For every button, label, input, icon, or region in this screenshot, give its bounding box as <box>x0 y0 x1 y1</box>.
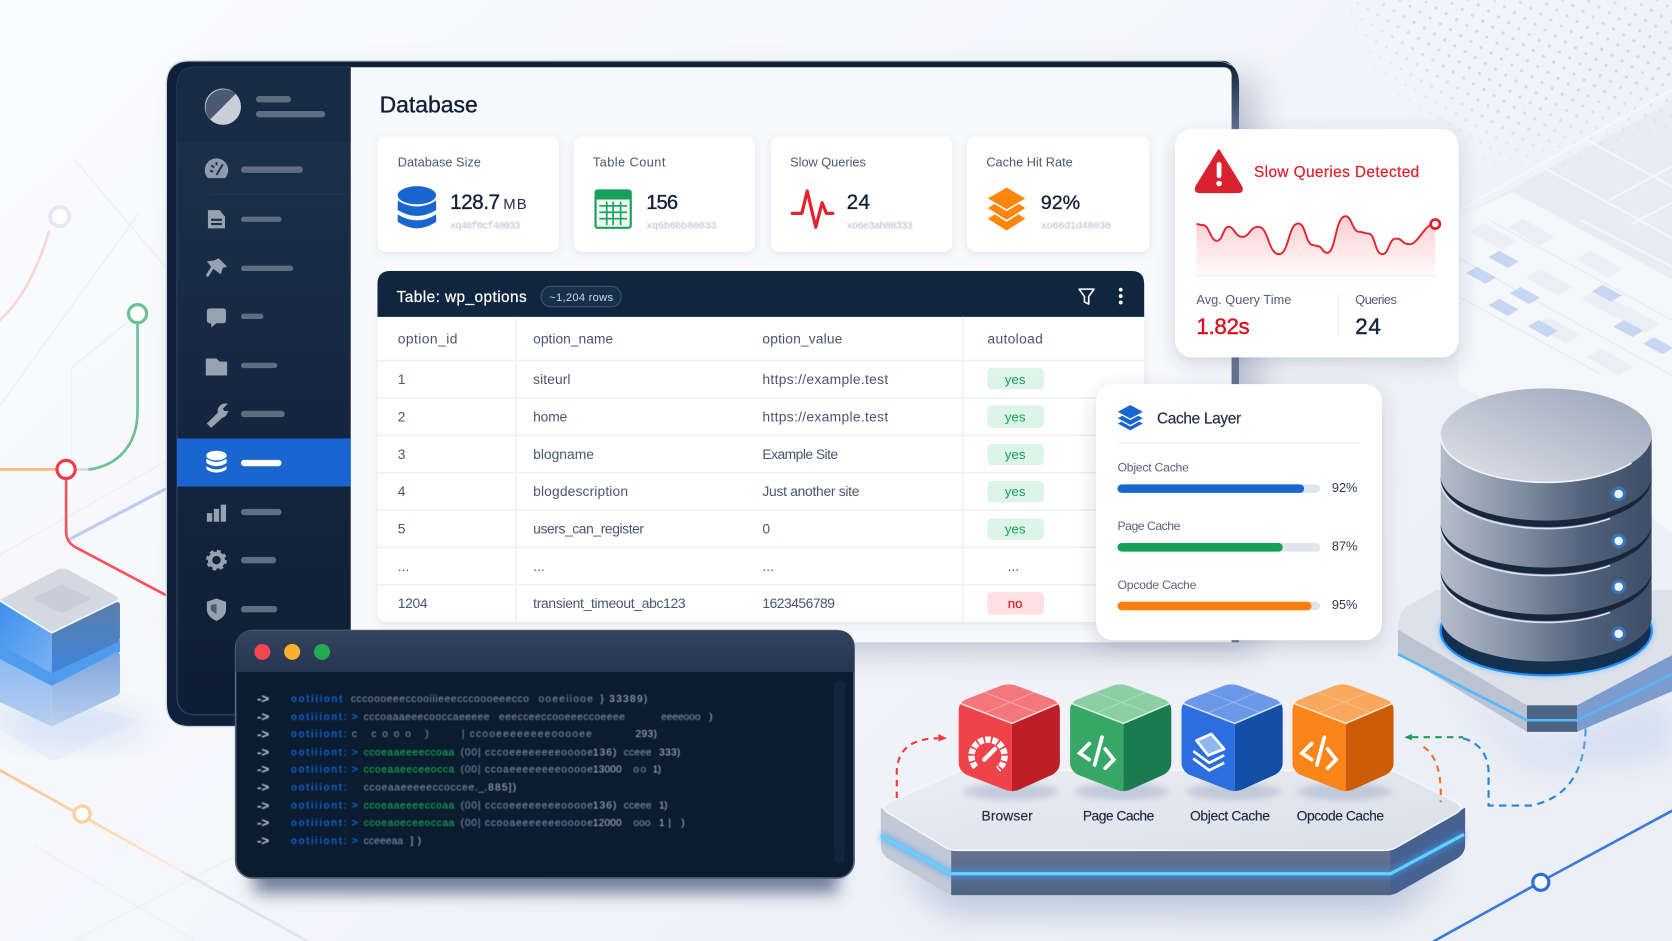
arrow: red dashed into browser cube <box>897 734 947 798</box>
terminal output: -> <box>257 726 269 741</box>
terminal output: -> <box>257 798 269 813</box>
cube: Browser <box>956 681 1062 795</box>
cube: Object Cache <box>1179 681 1285 795</box>
connector lines and nodes: left network <box>0 207 1672 941</box>
terminal output: ccoeaaeeceeocca <box>364 764 455 775</box>
terminal output: -> <box>257 761 269 776</box>
stat card: Database Size: MB <box>503 196 527 213</box>
stat card: Table Count: Table Count <box>593 154 666 169</box>
nav icon: folder <box>206 358 227 376</box>
terminal output: > <box>352 712 358 723</box>
terminal output: (00| cccoeeeeeeeeooooe <box>461 801 593 812</box>
progress: Opcode Cache: Opcode Cache <box>1118 578 1197 592</box>
nav bar <box>241 509 282 515</box>
terminal output: cceee <box>624 747 652 758</box>
main content panel <box>351 67 1232 642</box>
metric: queries <box>1355 292 1397 339</box>
terminal output: ccoeaoeceeoccaa <box>364 818 455 829</box>
sidebar <box>177 67 351 715</box>
nav icon: dashboard <box>205 158 228 178</box>
icon: stacked pages <box>1193 734 1224 770</box>
nav icon: settings <box>207 551 226 569</box>
terminal output: .885]) <box>484 783 516 794</box>
stat card: Table Count: 156 <box>646 192 678 214</box>
table header bar: Table: wp_options <box>397 289 527 306</box>
sparkline chart <box>1196 216 1440 276</box>
terminal output: ) <box>709 712 712 723</box>
metric: average query time: 1.82s <box>1196 314 1250 339</box>
table rows: blogname <box>533 446 594 462</box>
arrow: blue dashed link to database <box>1463 728 1586 806</box>
frame <box>166 61 1239 727</box>
terminal output: ]) <box>411 836 421 847</box>
progress: Object Cache <box>1118 461 1357 495</box>
progress: Page Cache <box>1118 519 1357 554</box>
terminal output: ootiiiont: <box>291 729 347 740</box>
table header bar: ~1,204 rows <box>549 292 614 304</box>
terminal output: ooo <box>633 818 651 829</box>
stat card: Slow Queries: 24 <box>847 191 870 214</box>
cube labels: Browser <box>982 807 1033 823</box>
nav bar <box>241 363 277 368</box>
active nav item: database <box>177 438 351 487</box>
terminal output: > <box>352 818 358 829</box>
terminal output: (00| ccoaeeeeeeeeooooe <box>461 764 593 775</box>
nav icon: comment <box>207 308 226 328</box>
table grid <box>377 317 1144 622</box>
stat card: Cache Hit Rate <box>967 137 1150 252</box>
terminal output: ootiiiont: <box>291 764 347 775</box>
terminal output: -> <box>257 709 269 724</box>
cube labels: Opcode Cache <box>1297 807 1384 823</box>
terminal output: 1| ) <box>659 818 685 829</box>
left stacked blue cubes <box>0 569 149 740</box>
stat card: Database Size: 128.7 <box>450 191 500 214</box>
terminal output: -> <box>257 780 269 795</box>
table rows: 5 <box>398 520 406 536</box>
table rows: 0 <box>762 520 770 536</box>
progress: Opcode Cache <box>1118 578 1357 612</box>
terminal output: 1) <box>659 801 668 812</box>
nav bar <box>241 217 282 222</box>
table column headers: autoload <box>987 331 1043 347</box>
stat card: Database Size: Database Size <box>398 154 481 169</box>
terminal output: ooeeiiooe <box>538 694 593 705</box>
terminal output: ootiiiont: <box>291 783 347 794</box>
terminal output: > <box>352 764 358 775</box>
database cylinder on platform <box>1398 388 1672 768</box>
stat card: Database Size: xq46f0cf48033 <box>450 220 520 232</box>
autoload status pills: yes <box>1005 372 1026 387</box>
terminal output: (00| cccoeeeeeeeeooooe <box>461 747 593 758</box>
heading: Database: Database <box>380 92 478 118</box>
nav bar <box>241 314 263 319</box>
platform top surface <box>884 770 1461 850</box>
terminal output: -> <box>257 815 269 830</box>
terminal title bar <box>236 631 854 672</box>
table rows: 3 <box>398 446 406 462</box>
cube labels: Page Cache <box>1083 807 1155 823</box>
table rows: ... <box>1008 558 1019 574</box>
nav icon: pin <box>206 258 227 277</box>
metric: average query time <box>1196 292 1291 339</box>
autoload status pills: yes <box>1005 484 1026 499</box>
stat card: Cache Hit Rate: xo66d1d48038 <box>1041 220 1111 232</box>
stat card: Table Count <box>574 137 755 252</box>
alert title: Slow Queries Detected <box>1254 164 1419 181</box>
terminal output: ootiiiont: <box>291 801 347 812</box>
nav icon: page <box>208 210 225 228</box>
cube shadows <box>964 783 1392 800</box>
panel: slow queries alert <box>1175 129 1459 357</box>
table rows: ... <box>762 558 774 574</box>
progress: Object Cache: Object Cache <box>1118 461 1189 475</box>
blue base ring <box>1440 586 1653 675</box>
stat card: Database Size <box>377 137 559 252</box>
progress: Page Cache: Page Cache <box>1118 519 1181 533</box>
icon: code <box>1080 737 1114 768</box>
terminal output: 12000 <box>593 818 622 829</box>
icon: orange stack <box>986 187 1027 232</box>
disc 2 <box>1441 468 1652 576</box>
table column headers: option_name <box>533 331 613 347</box>
terminal output: ccoeaaeeeeccoaa <box>364 747 455 758</box>
terminal output: ootiiiont: <box>291 836 347 847</box>
table column headers <box>398 331 1043 347</box>
terminal output: ootiiiont: <box>291 712 347 723</box>
table rows: 4 <box>398 483 406 499</box>
terminal output: ootiiiont <box>291 694 342 705</box>
terminal output: ccoeaaeeeeeccoccee._ <box>364 783 484 794</box>
terminal output: eeecceeccooeeeccoeeee <box>499 712 625 723</box>
icon: code <box>1302 737 1336 768</box>
nav icon: security <box>207 599 226 621</box>
icon: table <box>595 190 631 228</box>
table rows <box>398 371 1019 611</box>
terminal output: cccoaaaeeecooccaeeeee <box>364 712 490 723</box>
table rows: ... <box>533 558 545 574</box>
autoload status pills: yes <box>1005 447 1026 462</box>
terminal output: > <box>352 836 358 847</box>
metric: average query time: Avg. Query Time <box>1196 292 1291 307</box>
autoload status pills: no <box>1008 596 1023 611</box>
terminal output: cceeeaa <box>364 836 403 847</box>
terminal output: 1) <box>653 764 661 775</box>
stat card: Slow Queries: xo6e3ah88333 <box>847 220 913 232</box>
terminal output: 136) <box>593 801 616 812</box>
nav bar <box>241 606 277 612</box>
platform glow strip <box>881 834 1464 874</box>
terminal output <box>257 691 712 848</box>
cube: Opcode Cache <box>1290 681 1396 795</box>
database platform <box>1398 590 1672 768</box>
terminal output: 333) <box>659 747 680 758</box>
icon: warning triangle <box>1196 150 1242 192</box>
table rows: Just another site <box>762 483 860 499</box>
table column headers: option_id <box>398 331 457 347</box>
disc 4 <box>1441 562 1652 661</box>
table rows: siteurl <box>533 371 570 387</box>
terminal output: } 33389) <box>600 694 647 705</box>
progress: Page Cache: 87% <box>1332 539 1357 554</box>
platform side faces <box>881 808 1465 895</box>
nav bar <box>241 266 293 271</box>
heading: cache layer: Cache Layer <box>1157 411 1241 428</box>
table rows: https://example.test <box>762 408 888 424</box>
terminal output: -> <box>257 744 269 759</box>
stat card: Cache Hit Rate: Cache Hit Rate <box>986 154 1073 169</box>
table rows: users_can_register <box>533 520 644 536</box>
nav bar <box>241 557 276 563</box>
progress: Object Cache: 92% <box>1332 480 1357 495</box>
icon: blue stack <box>1116 404 1144 431</box>
nav icon: stats <box>207 505 226 522</box>
stat card: Cache Hit Rate: 92% <box>1041 192 1080 214</box>
table rows: home <box>533 408 568 424</box>
terminal output: | ccooeeeeeeeeooooee <box>462 729 592 740</box>
terminal output: oo <box>633 764 647 775</box>
terminal output: > <box>352 801 358 812</box>
icon: database <box>398 186 436 228</box>
table rows: 1204 <box>398 595 428 611</box>
terminal output: ootiiiont: <box>291 818 347 829</box>
table rows: 1 <box>398 371 406 387</box>
cube: Page Cache <box>1068 681 1173 795</box>
icon: menu dots <box>1119 288 1123 304</box>
table column headers: option_value <box>762 331 843 347</box>
stat card: Table Count: xq6b6bb86033 <box>646 220 717 232</box>
autoload status pills <box>987 368 1044 615</box>
arrow: green dashed into opcode cube <box>1404 734 1463 740</box>
icon: gauge <box>972 740 1005 769</box>
terminal output: ootiiiont: <box>291 747 347 758</box>
terminal output: cceee <box>624 801 652 812</box>
arrow: orange dashed return <box>1424 747 1441 802</box>
nav bar <box>241 166 303 173</box>
terminal output: cccoooeeeccooiiieeecccoooeeecco <box>351 694 529 705</box>
table header bar <box>377 271 1144 317</box>
terminal output: ccoeaaeeeeccoaa <box>364 801 455 812</box>
nav icon: wrench <box>208 404 227 427</box>
terminal output: 293) <box>636 729 657 740</box>
metric: queries: 24 <box>1355 314 1381 339</box>
terminal output: -> <box>257 833 269 848</box>
table rows: ... <box>398 558 409 574</box>
metric: queries: Queries <box>1355 292 1397 307</box>
table rows: 1623456789 <box>762 595 835 611</box>
progress: Opcode Cache: 95% <box>1332 597 1357 612</box>
table rows: 2 <box>398 408 406 424</box>
table rows: Example Site <box>762 446 838 462</box>
autoload status pills: yes <box>1005 521 1026 536</box>
terminal output: 136) <box>593 747 616 758</box>
stat card: Slow Queries: Slow Queries <box>790 154 866 169</box>
cube labels <box>982 807 1384 823</box>
terminal output: eeeeooo <box>661 712 701 723</box>
terminal output: -> <box>257 691 269 706</box>
icon: filter <box>1079 289 1094 304</box>
cube labels: Object Cache <box>1190 807 1270 823</box>
disc 3 <box>1441 515 1652 622</box>
terminal output: > <box>352 747 358 758</box>
database table: wp_options <box>377 271 1144 622</box>
cache layers platform <box>881 681 1465 912</box>
disc 1 <box>1441 388 1652 529</box>
panel: cache layer <box>1096 384 1382 640</box>
stat card: Slow Queries <box>771 137 952 252</box>
autoload status pills: yes <box>1005 409 1026 424</box>
terminal scrollbar <box>834 681 846 863</box>
nav bar <box>241 411 285 417</box>
terminal window <box>236 631 854 893</box>
dashboard window <box>166 61 1256 727</box>
table rows: transient_timeout_abc123 <box>533 595 686 611</box>
icon: pulse <box>792 191 833 227</box>
terminal output: (00| ccooaeeeeeeeooooe <box>461 818 593 829</box>
table rows: https://example.test <box>762 371 888 387</box>
table rows: blogdescription <box>533 483 628 499</box>
terminal output: 13000 <box>593 764 622 775</box>
terminal output: c cooo ) <box>352 729 429 740</box>
logo <box>205 89 325 125</box>
